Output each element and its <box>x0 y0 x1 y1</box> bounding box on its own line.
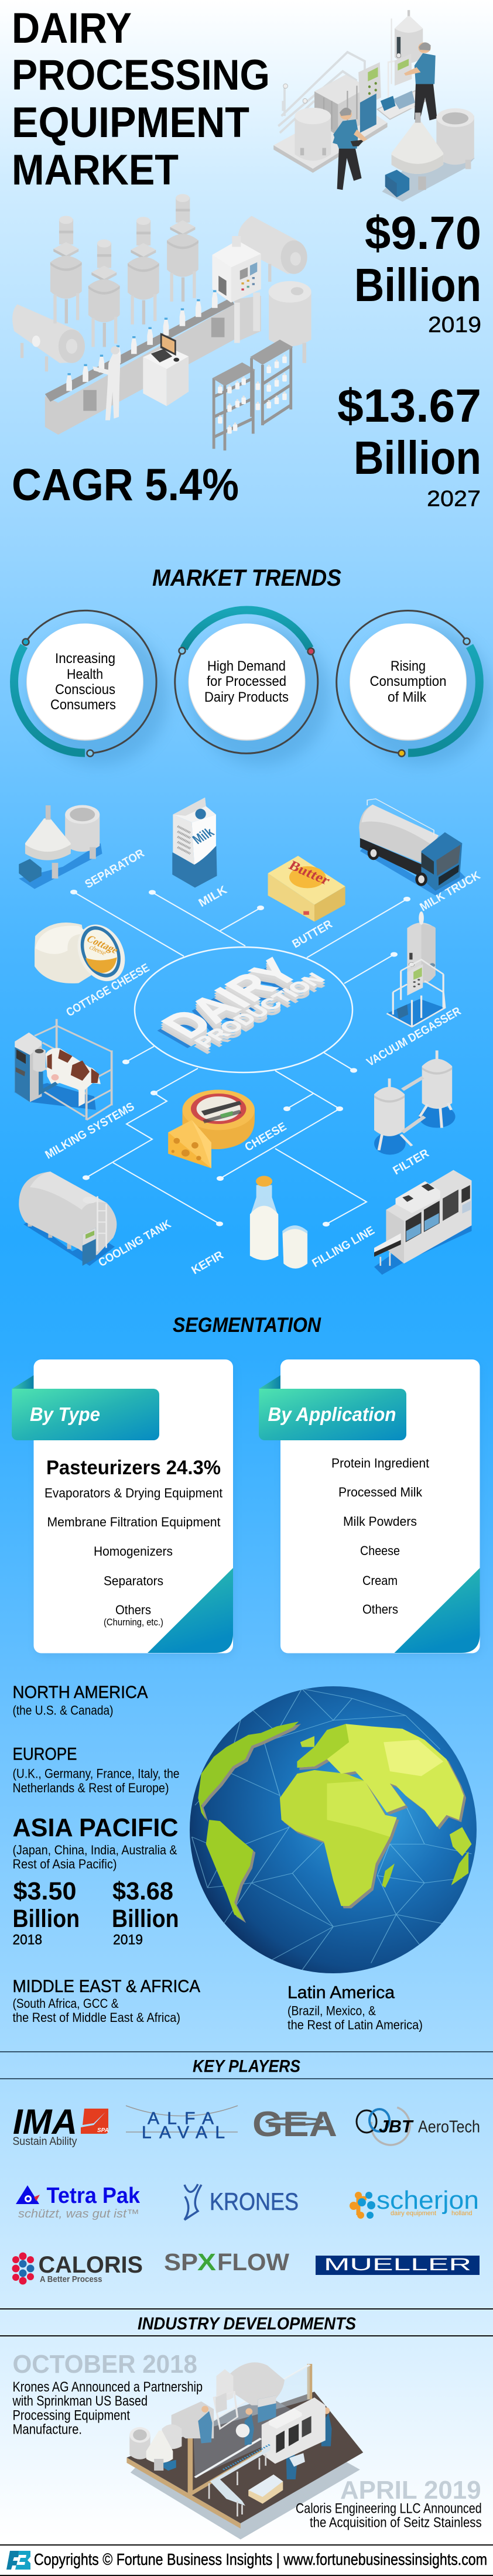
worker right <box>404 42 437 121</box>
region: europe: (U.K., Germany, France, Italy, the <box>13 1767 179 1781</box>
panel: by type: Pasteurizers 24.3% <box>46 1457 221 1479</box>
title: EQUIPMENT <box>12 99 249 146</box>
region: latin america: Latin America <box>287 1983 395 2003</box>
icon: separator <box>19 805 102 889</box>
icon: butter <box>268 856 345 921</box>
icon: filling line <box>374 1170 472 1275</box>
panel: by application: Protein Ingredient <box>331 1456 429 1470</box>
region: north america: NORTH AMERICA <box>13 1683 148 1702</box>
panel: trend 1: Consumers <box>50 697 116 713</box>
panel: trend 2: Dairy Products <box>204 689 289 705</box>
globe wireframe <box>192 1689 472 1970</box>
globe <box>190 1686 477 1973</box>
logo: Alfa Laval: LAVAL <box>142 2123 225 2143</box>
flow diagram connector lines <box>70 890 410 1226</box>
panel: trend 2: for Processed <box>207 674 286 689</box>
logo: Caloris <box>12 2252 143 2284</box>
region: asia pacific: $3.68 <box>112 1877 173 1905</box>
workers <box>198 2406 332 2479</box>
market size 2027: Billion <box>354 432 481 484</box>
market size 2019: $9.70 <box>365 207 481 259</box>
region: north america <box>13 1683 148 1717</box>
icon: milk truck <box>359 799 465 896</box>
logo: Caloris: CALORIS <box>39 2252 143 2278</box>
icon: butter: Butter <box>286 858 333 889</box>
panel: by type: Evaporators & Drying Equipment <box>44 1485 222 1501</box>
illustration: dairy plant floor <box>126 2362 363 2540</box>
panel: trend 2 <box>175 610 330 765</box>
region: middle east and africa: (South Africa, GCC & <box>13 1996 119 2011</box>
labels on flow diagram: COOLING TANK <box>96 1218 173 1269</box>
panel: by type <box>12 1359 234 1656</box>
icon: cottage cheese: cheese <box>87 944 108 956</box>
development: october 2018: Processing Equipment <box>13 2408 130 2424</box>
labels on flow diagram: MILK TRUCK <box>418 869 483 914</box>
panel: trend 1: Increasing <box>55 651 115 667</box>
title: MARKET <box>12 146 179 194</box>
logo: Mueller <box>316 2255 480 2275</box>
separator machine <box>385 108 474 197</box>
logo: IMA <box>13 2102 109 2148</box>
icon: milk bottle and glass <box>250 1176 307 1269</box>
logo: Krones: KRONES <box>210 2188 299 2215</box>
labels on flow diagram: CHEESE <box>242 1120 289 1154</box>
region: asia pacific: 2019 <box>113 1932 143 1948</box>
continents edge shadow <box>200 1724 466 1923</box>
continents <box>198 1721 472 1921</box>
panel: by application <box>259 1359 481 1656</box>
heading: market trends: MARKET TRENDS <box>152 565 341 591</box>
logo: Alfa Laval: ALFA <box>148 2109 214 2129</box>
illustration: processing machinery with workers <box>273 10 475 201</box>
region: asia pacific: $3.50 <box>13 1877 76 1905</box>
panel: by application: Milk Powders <box>343 1514 417 1529</box>
region: europe: EUROPE <box>13 1745 77 1764</box>
panel: by application: Cream <box>362 1573 398 1588</box>
logo: JBT AeroTech: JBT <box>379 2117 414 2137</box>
labels on flow diagram: MILKING SYSTEMS <box>43 1100 136 1161</box>
panel: by type: Separators <box>104 1573 163 1588</box>
development: october 2018: OCTOBER 2018 <box>13 2350 197 2379</box>
labels on flow diagram: KEFIR <box>190 1249 226 1277</box>
region: latin america: the Rest of Latin America) <box>287 2018 423 2032</box>
centre label: dairy production: DAIRY <box>150 952 311 1045</box>
icon: vacuum degasser <box>387 911 445 1028</box>
market size 2019 <box>354 207 481 337</box>
logo: JBT AeroTech: AeroTech <box>418 2118 480 2137</box>
logo: SPX Flow: X <box>197 2249 216 2276</box>
region: asia pacific: Billion <box>13 1905 80 1933</box>
development: october 2018: Krones AG Announced a Partnership <box>13 2379 203 2395</box>
labels on flow diagram: BUTTER <box>290 918 335 951</box>
region: asia pacific: ASIA PACIFIC <box>13 1813 178 1842</box>
icon: filter <box>374 1050 456 1155</box>
icon: milk carton <box>172 798 217 887</box>
logo: Mueller: MUELLER <box>324 2255 471 2274</box>
centre label: dairy production: DAIRY <box>150 959 311 1053</box>
panel: by type: Membrane Filtration Equipment <box>47 1515 220 1529</box>
logo: IMA: Sustain Ability <box>13 2136 77 2148</box>
logo: GEA: GEA <box>252 2104 337 2144</box>
heading: key players: KEY PLAYERS <box>193 2057 300 2076</box>
panel: by application: Others <box>362 1602 398 1617</box>
region: latin america: (Brazil, Mexico, & <box>287 2004 376 2018</box>
footer <box>0 2544 493 2576</box>
panel: by application: Processed Milk <box>338 1485 423 1499</box>
market size 2027: 2027 <box>427 487 481 511</box>
panel: trend 1: Conscious <box>55 682 115 698</box>
region: north america: (the U.S. & Canada) <box>13 1703 114 1717</box>
logo: Scherjon <box>350 2186 479 2219</box>
region: middle east and africa: MIDDLE EAST & AFRICA <box>13 1977 200 1996</box>
region: asia pacific <box>13 1813 179 1948</box>
development: october 2018 <box>12 2350 203 2438</box>
market size 2027 <box>337 380 481 511</box>
logo: Tetra Pak: schützt, was gut ist™ <box>18 2208 139 2220</box>
centre label: dairy production: DAIRY <box>150 957 311 1050</box>
logo: Scherjon: scherjon <box>376 2186 479 2215</box>
market size 2027: $13.67 <box>337 380 481 432</box>
icon: cheese <box>168 1089 255 1168</box>
heading: segmentation: SEGMENTATION <box>173 1314 321 1337</box>
icon: milk carton: Milk <box>189 825 217 847</box>
logo: Caloris: A Better Process <box>40 2274 102 2284</box>
development: october 2018: Manufacture. <box>13 2421 82 2438</box>
region: europe: Netherlands & Rest of Europe) <box>13 1781 169 1795</box>
region: europe <box>13 1745 179 1795</box>
panel: trend 3: Rising <box>391 658 426 674</box>
panel: trend 3: Consumption <box>370 674 446 689</box>
labels on flow diagram: MILK <box>197 883 230 910</box>
market size 2019: 2019 <box>428 313 481 337</box>
development: october 2018: with Sprinkman US Based <box>12 2393 148 2409</box>
logo: SPX Flow: FLOW <box>217 2249 289 2276</box>
icon: cottage cheese <box>35 921 132 984</box>
logo: Tetra Pak: Tetra Pak <box>47 2184 141 2208</box>
logo: Tetra Pak <box>16 2184 141 2220</box>
icon: fortune business insights logo <box>6 2551 30 2570</box>
logo: Alfa Laval <box>126 2106 238 2143</box>
panel: by application: Cheese <box>360 1543 400 1558</box>
labels on flow diagram <box>43 847 483 1277</box>
CAGR: CAGR 5.4% <box>12 460 239 510</box>
logo: IMA: IMA <box>13 2102 77 2141</box>
heading: industry developments: INDUSTRY DEVELOPMENTS <box>138 2314 356 2334</box>
labels on flow diagram: COTTAGE CHEESE <box>64 961 152 1019</box>
logo: Scherjon: dairy equipment <box>391 2210 436 2217</box>
centre label: dairy production: PRODUCTION <box>189 975 330 1057</box>
title <box>12 5 270 194</box>
panel: trend 3 <box>337 610 492 765</box>
icon: milking system with cow <box>14 1019 112 1120</box>
region: asia pacific: (Japan, China, India, Australia & <box>13 1843 177 1857</box>
region: asia pacific: Billion <box>112 1905 179 1933</box>
labels on flow diagram: SEPARATOR <box>83 847 147 891</box>
title: DAIRY <box>12 5 132 52</box>
panel: trend 1: Health <box>67 667 103 682</box>
panel: by type: Others <box>115 1603 151 1617</box>
logo: Scherjon: holland <box>451 2210 472 2217</box>
development: april 2019 <box>296 2476 482 2531</box>
logo: JBT AeroTech <box>357 2101 480 2150</box>
region: middle east and africa: the Rest of Middle East & Africa) <box>13 2010 180 2025</box>
region: asia pacific: Rest of Asia Pacific) <box>13 1857 117 1871</box>
panel: trend 2: High Demand <box>207 658 286 674</box>
region: middle east and africa <box>13 1977 200 2025</box>
centre label: dairy production: PRODUCTION <box>189 972 330 1054</box>
labels on flow diagram: VACUUM DEGASSER <box>364 1005 464 1069</box>
centre label: dairy production: PRODUCTION <box>189 969 330 1051</box>
centre label: dairy production: DAIRY <box>150 955 311 1048</box>
logo: IMA: SPA <box>97 2127 109 2134</box>
illustration: grey production line <box>12 194 311 450</box>
logo: SPX Flow <box>164 2249 289 2276</box>
region: latin america <box>287 1983 423 2032</box>
labels on flow diagram: FILLING LINE <box>310 1224 377 1270</box>
panel: by application: By Application <box>268 1403 396 1425</box>
worker left <box>333 108 367 190</box>
region: asia pacific: 2018 <box>13 1932 42 1948</box>
panel: by type: Homogenizers <box>94 1544 173 1559</box>
labels on flow diagram: FILTER <box>391 1147 432 1177</box>
panel: trend 1 <box>14 610 169 765</box>
panel: trend 3: of Milk <box>388 689 427 705</box>
icon: cottage cheese: Cottage <box>84 933 122 956</box>
logo: Krones <box>184 2184 299 2220</box>
development: april 2019: APRIL 2019 <box>340 2476 481 2505</box>
centre label: dairy production: DAIRY <box>146 961 308 1054</box>
logo: SPX Flow: SP <box>164 2249 198 2276</box>
panel: by type: By Type <box>30 1403 100 1425</box>
icon: cooling tank <box>19 1171 117 1266</box>
panel: by type: (Churning, etc.) <box>104 1617 163 1628</box>
title: PROCESSING <box>12 52 270 99</box>
